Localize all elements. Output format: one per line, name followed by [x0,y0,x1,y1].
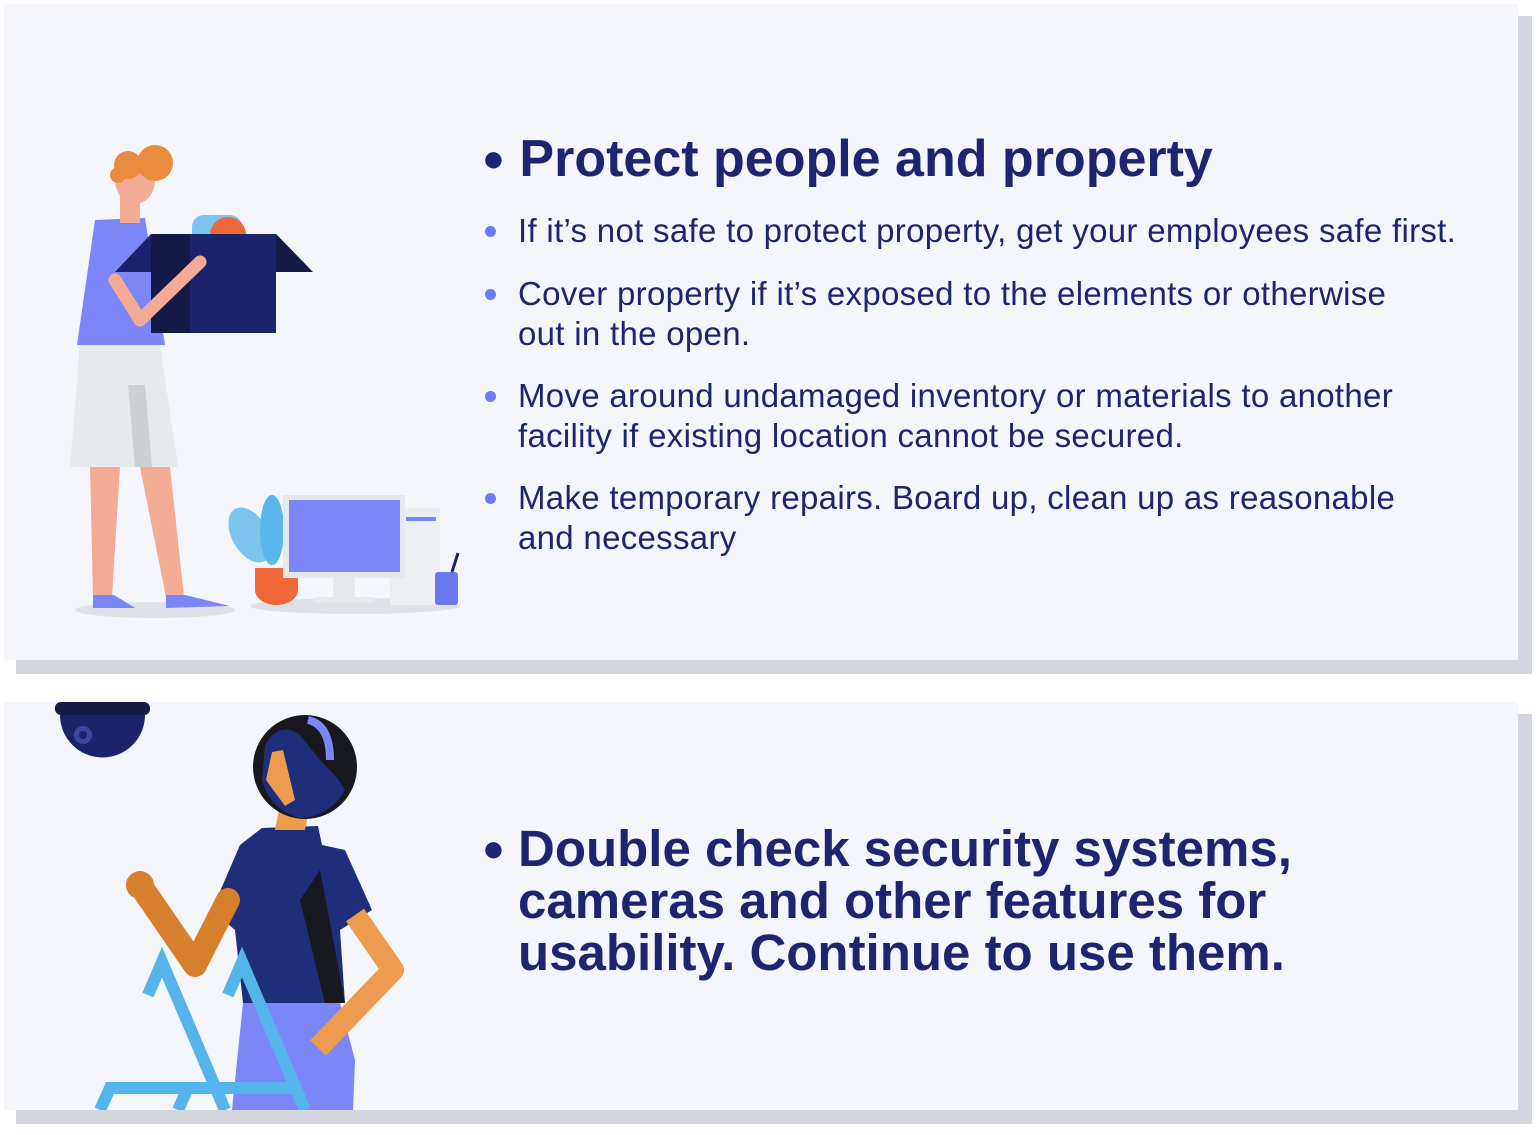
heading [482,820,1292,981]
bullet list: out in the open. [518,315,750,352]
heading: ● Protect people and property [482,130,1213,188]
bullet list: facility if existing location cannot be secured. [518,417,1184,454]
panel: protect people and property [4,4,1518,660]
bullet list: If it’s not safe to protect property, get your employees safe first. [518,212,1456,249]
bullet list: Move around undamaged inventory or materials to another [518,377,1393,414]
illustration: man with box and computer [70,145,460,618]
heading: Double check security systems, [518,820,1292,877]
bullet list: and necessary [518,519,737,556]
heading: ● [482,828,505,870]
bullet list [485,212,1456,556]
panel: security systems [4,702,1518,1110]
bullet list: Cover property if it’s exposed to the elements or otherwise [518,275,1386,312]
bullet list: Make temporary repairs. Board up, clean up as reasonable [518,479,1395,516]
heading: usability. Continue to use them. [518,924,1285,981]
illustration: woman and camera [55,702,404,1110]
heading: cameras and other features for [518,872,1266,929]
